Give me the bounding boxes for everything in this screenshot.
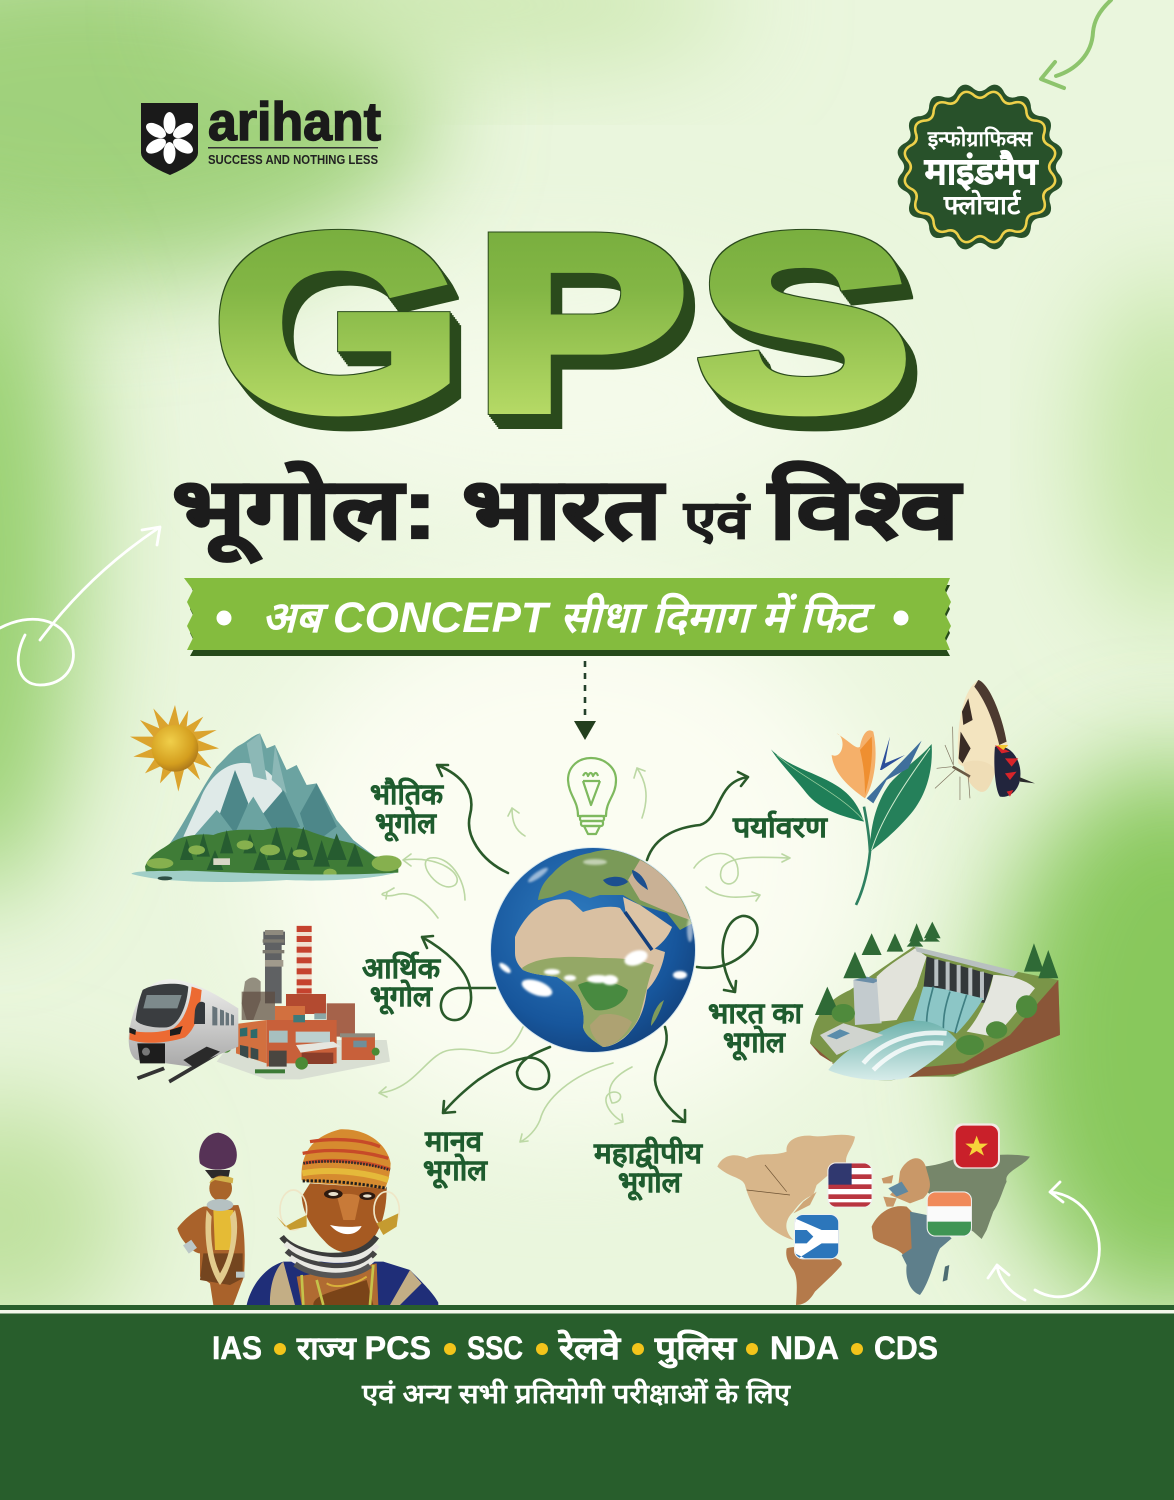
arrow to environment bbox=[647, 772, 748, 860]
large portrait bbox=[247, 1129, 438, 1305]
arrow: white loop on left bbox=[0, 527, 160, 685]
title: GPS extruded lettering bbox=[215, 186, 910, 460]
footer band bbox=[0, 1305, 1174, 1500]
illustration: globe bbox=[490, 847, 696, 1053]
logo: arihant bbox=[141, 92, 381, 175]
train bbox=[129, 979, 238, 1083]
arrow: dotted down to bulb bbox=[574, 661, 596, 740]
illustration: world map with flags (continental geography) bbox=[717, 1123, 1030, 1305]
arrows: light decorative mind-map lines bbox=[379, 768, 790, 1142]
label: environment: पर्यावरण bbox=[732, 810, 828, 844]
label: human geography bbox=[423, 1126, 488, 1189]
title: GPS extruded lettering: G bbox=[215, 186, 461, 459]
illustration: train and factory (economic geography) bbox=[129, 925, 390, 1083]
ribbon: concept tagline bbox=[184, 578, 951, 656]
arrow: top right to badge bbox=[1041, 0, 1111, 88]
label: economic geography bbox=[362, 951, 442, 1015]
label: human geography: भूगोल bbox=[423, 1153, 488, 1189]
label: India geography: भारत का bbox=[708, 998, 803, 1030]
label: India geography: भूगोल bbox=[723, 1025, 786, 1061]
subtitle: bhugol bharat evam vishwa: भारत bbox=[462, 462, 666, 556]
badge: infographics mindmap flowchart: माइंडमैप bbox=[924, 150, 1039, 192]
small figure bbox=[177, 1133, 245, 1305]
illustration: tribal woman and man portrait (human geography) bbox=[177, 1129, 438, 1305]
map: Americas bbox=[717, 1135, 855, 1305]
label: physical geography: भूगोल bbox=[375, 806, 437, 842]
illustration: plant and butterfly (environment) bbox=[771, 680, 1035, 905]
arrow: white bottom-right loop bbox=[988, 1182, 1099, 1300]
exam list: CDS bbox=[874, 1330, 938, 1366]
flag: Hungary bbox=[927, 1191, 972, 1237]
label: continental geography: भूगोल bbox=[618, 1165, 682, 1201]
label: India geography bbox=[708, 998, 803, 1061]
subtitle: bhugol bharat evam vishwa bbox=[172, 461, 962, 564]
butterfly bbox=[935, 680, 1035, 800]
label: economic geography: भूगोल bbox=[370, 979, 433, 1015]
tagline: SUCCESS AND NOTHING LESS bbox=[208, 153, 378, 167]
badge: infographics mindmap flowchart: फ्लोचार्ट bbox=[943, 189, 1022, 220]
exam list: पुलिस bbox=[654, 1329, 738, 1369]
exam list: राज्य PCS bbox=[296, 1330, 431, 1366]
label: continental geography bbox=[593, 1136, 703, 1201]
label: physical geography: भौतिक bbox=[370, 777, 445, 811]
icon: sun bbox=[130, 705, 219, 792]
arrow to physical geography bbox=[437, 765, 508, 873]
arrow to continental geography bbox=[655, 1027, 685, 1122]
subtitle: bhugol bharat evam vishwa: एवं bbox=[683, 490, 751, 549]
exam list: SSC bbox=[467, 1330, 523, 1366]
ribbon: concept tagline: अब CONCEPT सीधा दिमाग में फिट bbox=[262, 592, 876, 642]
exam list: IAS bbox=[212, 1330, 262, 1366]
exam list: रेलवे bbox=[558, 1329, 621, 1366]
map: Europe, Asia, Africa bbox=[872, 1153, 1030, 1295]
arrow to economic geography bbox=[422, 936, 495, 1020]
plant bbox=[771, 730, 932, 905]
flag: USA bbox=[827, 1162, 873, 1208]
subtitle: bhugol bharat evam vishwa: विश्व bbox=[767, 461, 962, 556]
arrows: dark curved connectors from globe bbox=[422, 765, 758, 1122]
flag: Vietnam bbox=[953, 1123, 1000, 1169]
label: continental geography: महाद्वीपीय bbox=[593, 1136, 703, 1170]
exam subline: एवं अन्य सभी प्रतियोगी परीक्षाओं के लिए bbox=[361, 1378, 791, 1409]
arrow to human geography bbox=[443, 1047, 550, 1113]
illustration: hydro dam (India geography) bbox=[810, 922, 1060, 1080]
badge: infographics mindmap flowchart bbox=[889, 76, 1071, 258]
illustration: sun and mountain (physical geography) bbox=[130, 705, 402, 882]
wordmark: arihant bbox=[208, 92, 381, 152]
icon: light bulb bbox=[568, 758, 616, 834]
arrow to India geography bbox=[697, 916, 758, 992]
label: economic geography: आर्थिक bbox=[362, 951, 442, 985]
flag: Scotland bbox=[794, 1214, 839, 1259]
label: human geography: मानव bbox=[424, 1126, 484, 1158]
title: GPS extruded lettering: P bbox=[476, 186, 686, 460]
label: physical geography bbox=[370, 777, 445, 842]
exam list: NDA bbox=[770, 1330, 839, 1366]
icon: shield with flower bbox=[141, 103, 198, 175]
exam list bbox=[212, 1329, 938, 1369]
badge: infographics mindmap flowchart: इन्फोग्राफिक्स bbox=[927, 126, 1034, 151]
subtitle: bhugol bharat evam vishwa: भूगोल: bbox=[172, 461, 437, 564]
factory bbox=[217, 925, 390, 1079]
title: GPS extruded lettering: S bbox=[699, 186, 910, 459]
